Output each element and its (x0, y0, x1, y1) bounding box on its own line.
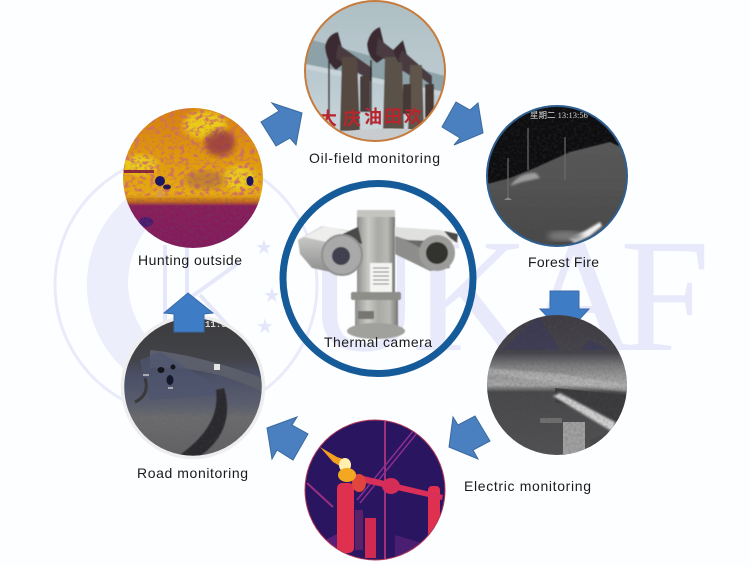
icon: camera pillar (347, 210, 405, 339)
arrow: forest fire to electric monitoring (540, 291, 589, 335)
label: Road monitoring (137, 465, 248, 481)
arrow: road to hunting (164, 293, 213, 332)
ring (283, 184, 473, 374)
panel: road monitoring (122, 316, 264, 481)
icon: right camera (395, 227, 459, 271)
photo: pumpjacks: 庆 (343, 108, 361, 129)
panel: hunting outside (122, 108, 263, 268)
label: Hunting outside (138, 252, 242, 268)
photo: pumpjacks: 欢 (404, 107, 422, 127)
photo: road at night (123, 317, 263, 460)
panel: electric thermal image (305, 420, 445, 560)
photo: night bridge (487, 315, 627, 455)
ring (122, 316, 264, 458)
watermark logo (55, 154, 710, 416)
panel: forest fire (487, 106, 627, 270)
watermark logo: ★ (256, 314, 274, 338)
center panel: thermal camera (283, 184, 473, 374)
icon: left camera (298, 226, 362, 275)
photo: road at night: 11:33 (205, 320, 232, 330)
panel: electric monitoring bridge (464, 315, 627, 494)
watermark logo: U (305, 207, 422, 386)
panel: oil-field monitoring (305, 0, 445, 166)
photo: thermal birds (122, 108, 263, 248)
photo: pumpjacks (305, 0, 445, 145)
arrow: electric image to road (267, 417, 308, 460)
watermark logo: F (620, 207, 710, 386)
watermark logo: ★ (255, 235, 273, 259)
arrow: bridge to electric image (449, 416, 490, 459)
ring (487, 106, 627, 246)
arrow: hunting to oil-field (261, 103, 302, 146)
ring (305, 1, 445, 141)
watermark logo: ★ (263, 283, 281, 307)
label: thermal camera: Thermal camera (324, 334, 432, 350)
label: Electric monitoring (464, 478, 591, 494)
arrow: oil-field to forest fire (442, 102, 483, 145)
label: Forest Fire (528, 254, 599, 270)
label: Oil-field monitoring (309, 150, 440, 166)
photo: night hillside (487, 106, 627, 246)
photo: pumpjacks: 油 (364, 107, 382, 127)
watermark logo: K (412, 207, 529, 386)
ring (305, 420, 445, 560)
photo: power lines (305, 420, 445, 560)
photo: night hillside: 星期二 13:13:56 (530, 110, 588, 120)
watermark logo: A (520, 207, 637, 386)
photo: pumpjacks: 大 (319, 109, 337, 129)
photo: pumpjacks: 田 (384, 107, 402, 127)
